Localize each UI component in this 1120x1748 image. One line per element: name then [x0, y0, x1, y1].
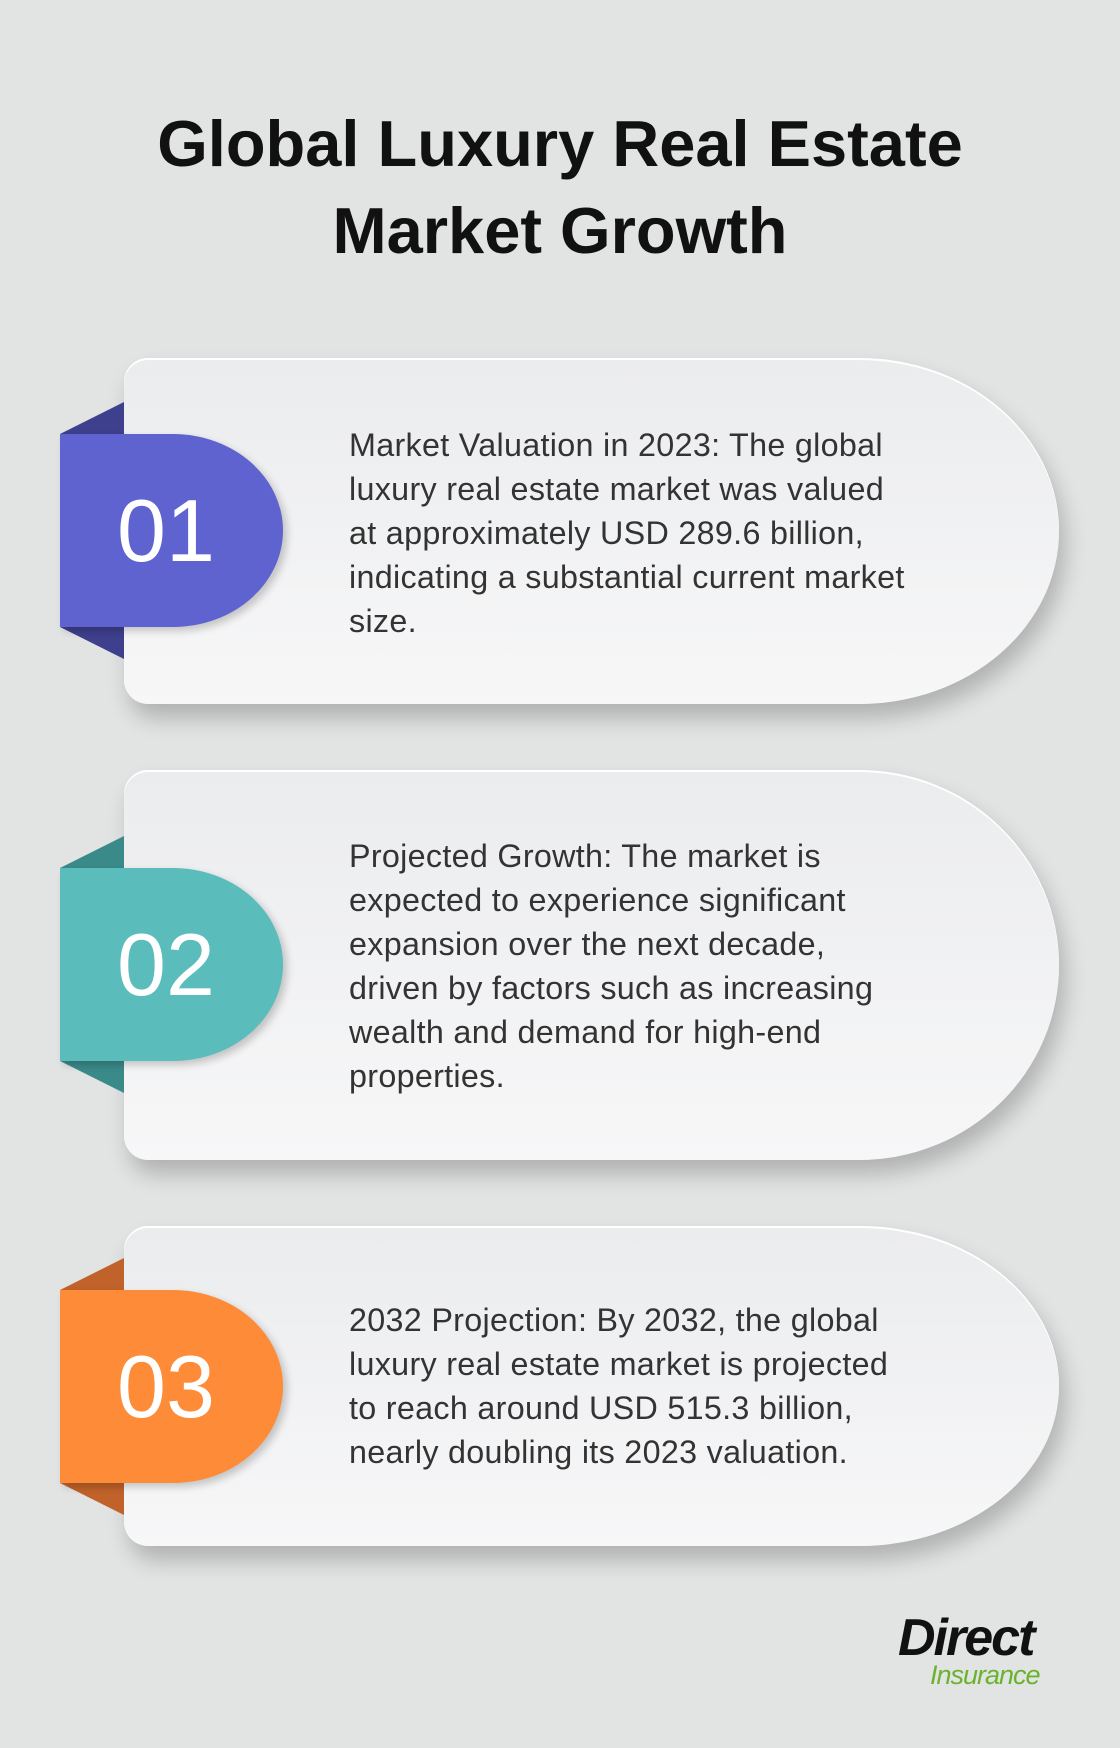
tab 03: 03: [117, 1337, 215, 1436]
text 2: driven by factors such as increasing: [349, 970, 873, 1006]
panel: card 2: [124, 770, 1059, 1160]
text 3: nearly doubling its 2023 valuation.: [349, 1434, 848, 1470]
text 1: luxury real estate market was valued: [349, 471, 884, 507]
title: [157, 107, 963, 267]
text 3: to reach around USD 515.3 billion,: [349, 1390, 853, 1426]
text 1: at approximately USD 289.6 billion,: [349, 515, 864, 551]
text 2: expected to experience significant: [349, 882, 846, 918]
title: Market Growth: [332, 194, 788, 267]
panel: card 3: [124, 1226, 1059, 1546]
tab 01: 01: [117, 481, 215, 580]
text 2: Projected Growth: The market is: [349, 838, 821, 874]
text 3: 2032 Projection: By 2032, the global: [349, 1302, 879, 1338]
tab 02: [60, 836, 290, 1093]
text 2: properties.: [349, 1058, 505, 1094]
text 1: [349, 427, 905, 639]
logo: Insurance: [930, 1660, 1040, 1690]
title: Global Luxury Real Estate: [157, 107, 963, 180]
tab 02: 02: [117, 915, 215, 1014]
tab 01: [60, 402, 290, 659]
text 3: [349, 1302, 888, 1470]
logo: [898, 1609, 1040, 1690]
text 1: size.: [349, 603, 417, 639]
text 1: Market Valuation in 2023: The global: [349, 427, 883, 463]
text 2: wealth and demand for high-end: [349, 1014, 821, 1050]
text 2: expansion over the next decade,: [349, 926, 825, 962]
text 2: [349, 838, 873, 1094]
panel: card 1: [124, 358, 1059, 704]
logo: Direct: [898, 1609, 1033, 1667]
text 1: indicating a substantial current market: [349, 559, 905, 595]
text 3: luxury real estate market is projected: [349, 1346, 888, 1382]
tab 03: [60, 1258, 290, 1515]
